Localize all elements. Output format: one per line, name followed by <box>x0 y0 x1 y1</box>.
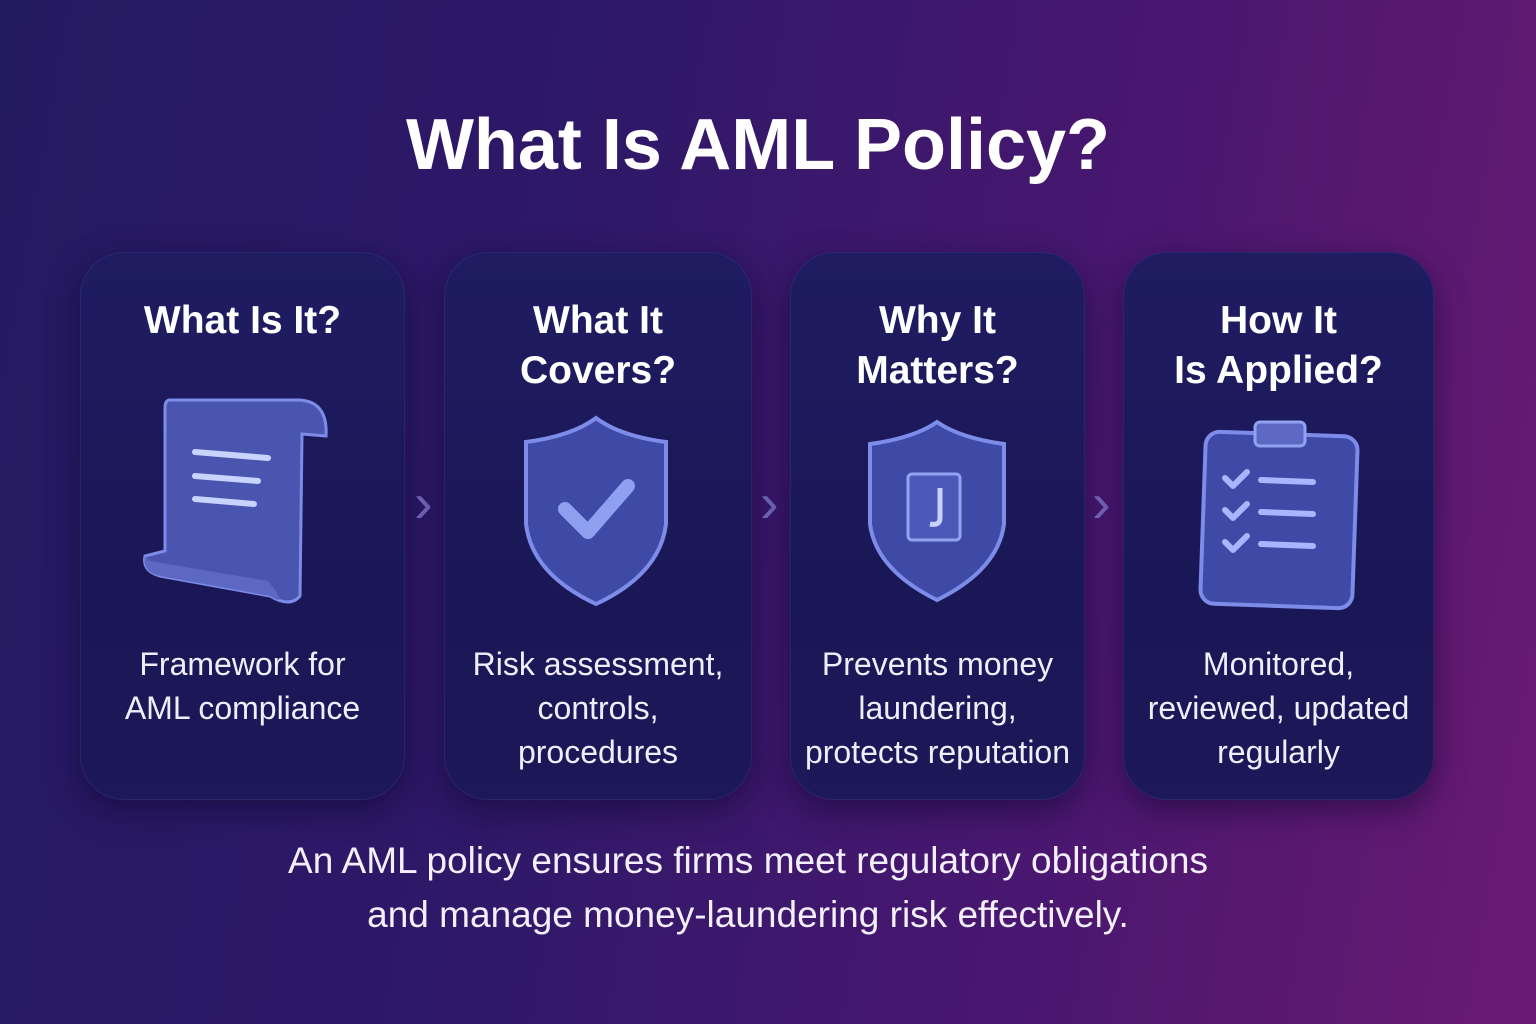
text: AML compliance <box>125 690 360 726</box>
arrow: › <box>760 471 779 534</box>
heading <box>856 299 1019 392</box>
panel: how it is applied <box>1123 252 1434 800</box>
text: laundering, <box>858 690 1017 726</box>
heading: Matters? <box>856 349 1019 392</box>
heading: Covers? <box>520 349 676 392</box>
text: reviewed, updated <box>1148 690 1409 726</box>
panel: what it covers <box>444 252 752 800</box>
text: procedures <box>518 734 678 770</box>
heading <box>520 299 676 392</box>
arrow: › <box>414 471 433 534</box>
heading: Why It <box>879 299 996 342</box>
heading <box>1174 299 1383 392</box>
icon: scroll <box>143 398 328 604</box>
footer summary: and manage money-laundering risk effectively. <box>367 894 1129 935</box>
arrow: › <box>1092 471 1111 534</box>
panel: what is it <box>80 252 405 800</box>
icon: clipboard <box>1198 420 1360 610</box>
text <box>1148 646 1409 770</box>
heading: How It <box>1220 299 1337 342</box>
text: Prevents money <box>822 646 1053 682</box>
text: regularly <box>1217 734 1340 770</box>
heading: What Is It? <box>144 299 341 342</box>
text: Framework for <box>139 646 346 682</box>
text: Monitored, <box>1203 646 1354 682</box>
heading: What It <box>533 299 663 342</box>
title: What Is AML Policy? <box>406 105 1110 185</box>
text: Risk assessment, <box>473 646 723 682</box>
heading: Is Applied? <box>1174 349 1383 392</box>
text: controls, <box>538 690 658 726</box>
footer summary: An AML policy ensures firms meet regulatory obligations <box>288 840 1208 881</box>
icon: shield document <box>868 420 1006 602</box>
footer summary <box>288 840 1208 935</box>
icon: shield check <box>524 416 668 606</box>
text <box>125 646 360 726</box>
text <box>805 646 1070 770</box>
text <box>473 646 723 770</box>
panel: why it matters <box>790 252 1085 800</box>
text: protects reputation <box>805 734 1070 770</box>
